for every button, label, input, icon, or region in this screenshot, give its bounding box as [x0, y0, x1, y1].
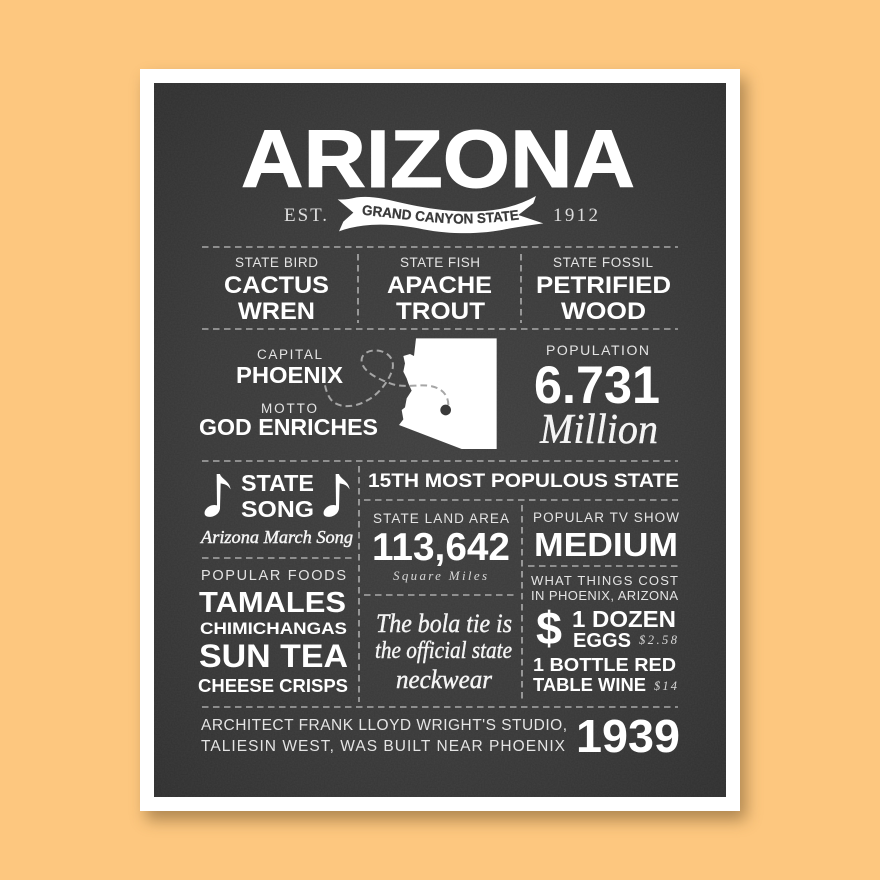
panel: what things cost: $14	[654, 679, 677, 693]
icon: Arizona state shape	[399, 338, 497, 449]
panel: popular foods: POPULAR FOODS	[201, 568, 346, 584]
icon: dollar sign: $	[536, 602, 562, 654]
panel: population: 6.731	[534, 356, 660, 415]
panel: what things cost: 1 BOTTLE RED	[533, 654, 676, 675]
panel: motto: GOD ENRICHES	[199, 414, 378, 440]
populous state rank: 15TH MOST POPULOUS STATE	[368, 470, 679, 492]
panel: what things cost: TABLE WINE	[533, 675, 646, 695]
panel: Frank Lloyd Wright fact: TALIESIN WEST, WAS BUILT NEAR PHOENIX	[201, 738, 566, 755]
panel: popular TV show: POPULAR TV SHOW	[533, 510, 679, 525]
panel: state song: SONG	[241, 496, 314, 522]
panel: popular foods: SUN TEA	[199, 638, 348, 674]
panel: popular foods: CHEESE CRISPS	[198, 676, 348, 696]
panel: state fossil: STATE FOSSIL	[553, 255, 653, 270]
chalkboard panel	[154, 83, 726, 797]
panel: bola tie fact: The bola tie is	[376, 609, 512, 638]
established line and banner: EST.	[284, 205, 327, 226]
title: ARIZONA	[241, 114, 635, 205]
panel: population: POPULATION	[546, 342, 649, 358]
panel: motto	[199, 401, 378, 440]
panel: bola tie fact: neckwear	[396, 665, 493, 694]
panel: what things cost: 1 DOZEN	[572, 606, 676, 632]
panel: state song: STATE	[241, 470, 314, 496]
panel: bola tie fact	[375, 609, 512, 694]
panel: land area: STATE LAND AREA	[373, 511, 509, 526]
icon: left music note	[205, 474, 231, 517]
dashed route	[325, 350, 448, 406]
white poster frame	[140, 69, 740, 811]
panel: state bird: CACTUS	[224, 272, 329, 299]
map of Arizona with route	[325, 338, 497, 449]
panel: what things cost: IN PHOENIX, ARIZONA	[531, 588, 678, 603]
panel: what things cost	[531, 573, 678, 695]
established line and banner	[284, 196, 598, 234]
panel: state song: Arizona March Song	[200, 527, 353, 547]
icon: right music note	[324, 474, 350, 517]
panel: population: Million	[539, 407, 658, 453]
panel: state fish: STATE FISH	[400, 255, 480, 270]
panel: motto: MOTTO	[261, 401, 317, 416]
panel: popular foods: CHIMICHANGAS	[200, 620, 347, 638]
panel: capital: PHOENIX	[236, 362, 343, 388]
panel: state fish	[387, 255, 492, 325]
Phoenix marker	[440, 405, 451, 415]
panel: land area	[372, 511, 510, 583]
banner: Grand Canyon State	[338, 196, 544, 234]
panel: capital: CAPITAL	[257, 347, 322, 362]
panel: what things cost: WHAT THINGS COST	[531, 573, 678, 588]
frame shadow	[146, 78, 746, 820]
panel: Frank Lloyd Wright fact: ARCHITECT FRANK LLOYD WRIGHT'S STUDIO,	[201, 717, 567, 734]
panel: capital	[236, 347, 343, 388]
panel: bola tie fact: the official state	[375, 638, 512, 664]
panel: state fossil	[536, 255, 671, 325]
panel: land area: Square Miles	[393, 568, 487, 583]
banner: Grand Canyon State: GRAND CANYON STATE	[362, 205, 519, 224]
panel: popular TV show: MEDIUM	[534, 526, 678, 563]
panel: population	[534, 342, 660, 453]
divider lines	[202, 247, 678, 707]
panel: popular foods	[198, 568, 348, 696]
panel: what things cost: EGGS	[573, 630, 631, 652]
panel: state song	[200, 470, 353, 547]
panel: what things cost: $2.58	[639, 633, 678, 647]
panel: state fish: APACHE	[387, 272, 492, 299]
panel: land area: 113,642	[372, 526, 510, 569]
panel: state bird	[224, 255, 329, 325]
established line and banner: 1912	[553, 205, 598, 226]
panel: state bird: STATE BIRD	[235, 255, 318, 270]
panel: popular foods: TAMALES	[199, 587, 346, 619]
panel: Frank Lloyd Wright fact: 1939	[576, 710, 680, 762]
panel: Frank Lloyd Wright fact	[201, 710, 680, 762]
panel: state fossil: PETRIFIED	[536, 272, 671, 299]
panel: state fish: TROUT	[396, 298, 485, 325]
panel: popular TV show	[533, 510, 679, 563]
panel: state fossil: WOOD	[561, 298, 646, 325]
panel: state bird: WREN	[238, 298, 315, 325]
